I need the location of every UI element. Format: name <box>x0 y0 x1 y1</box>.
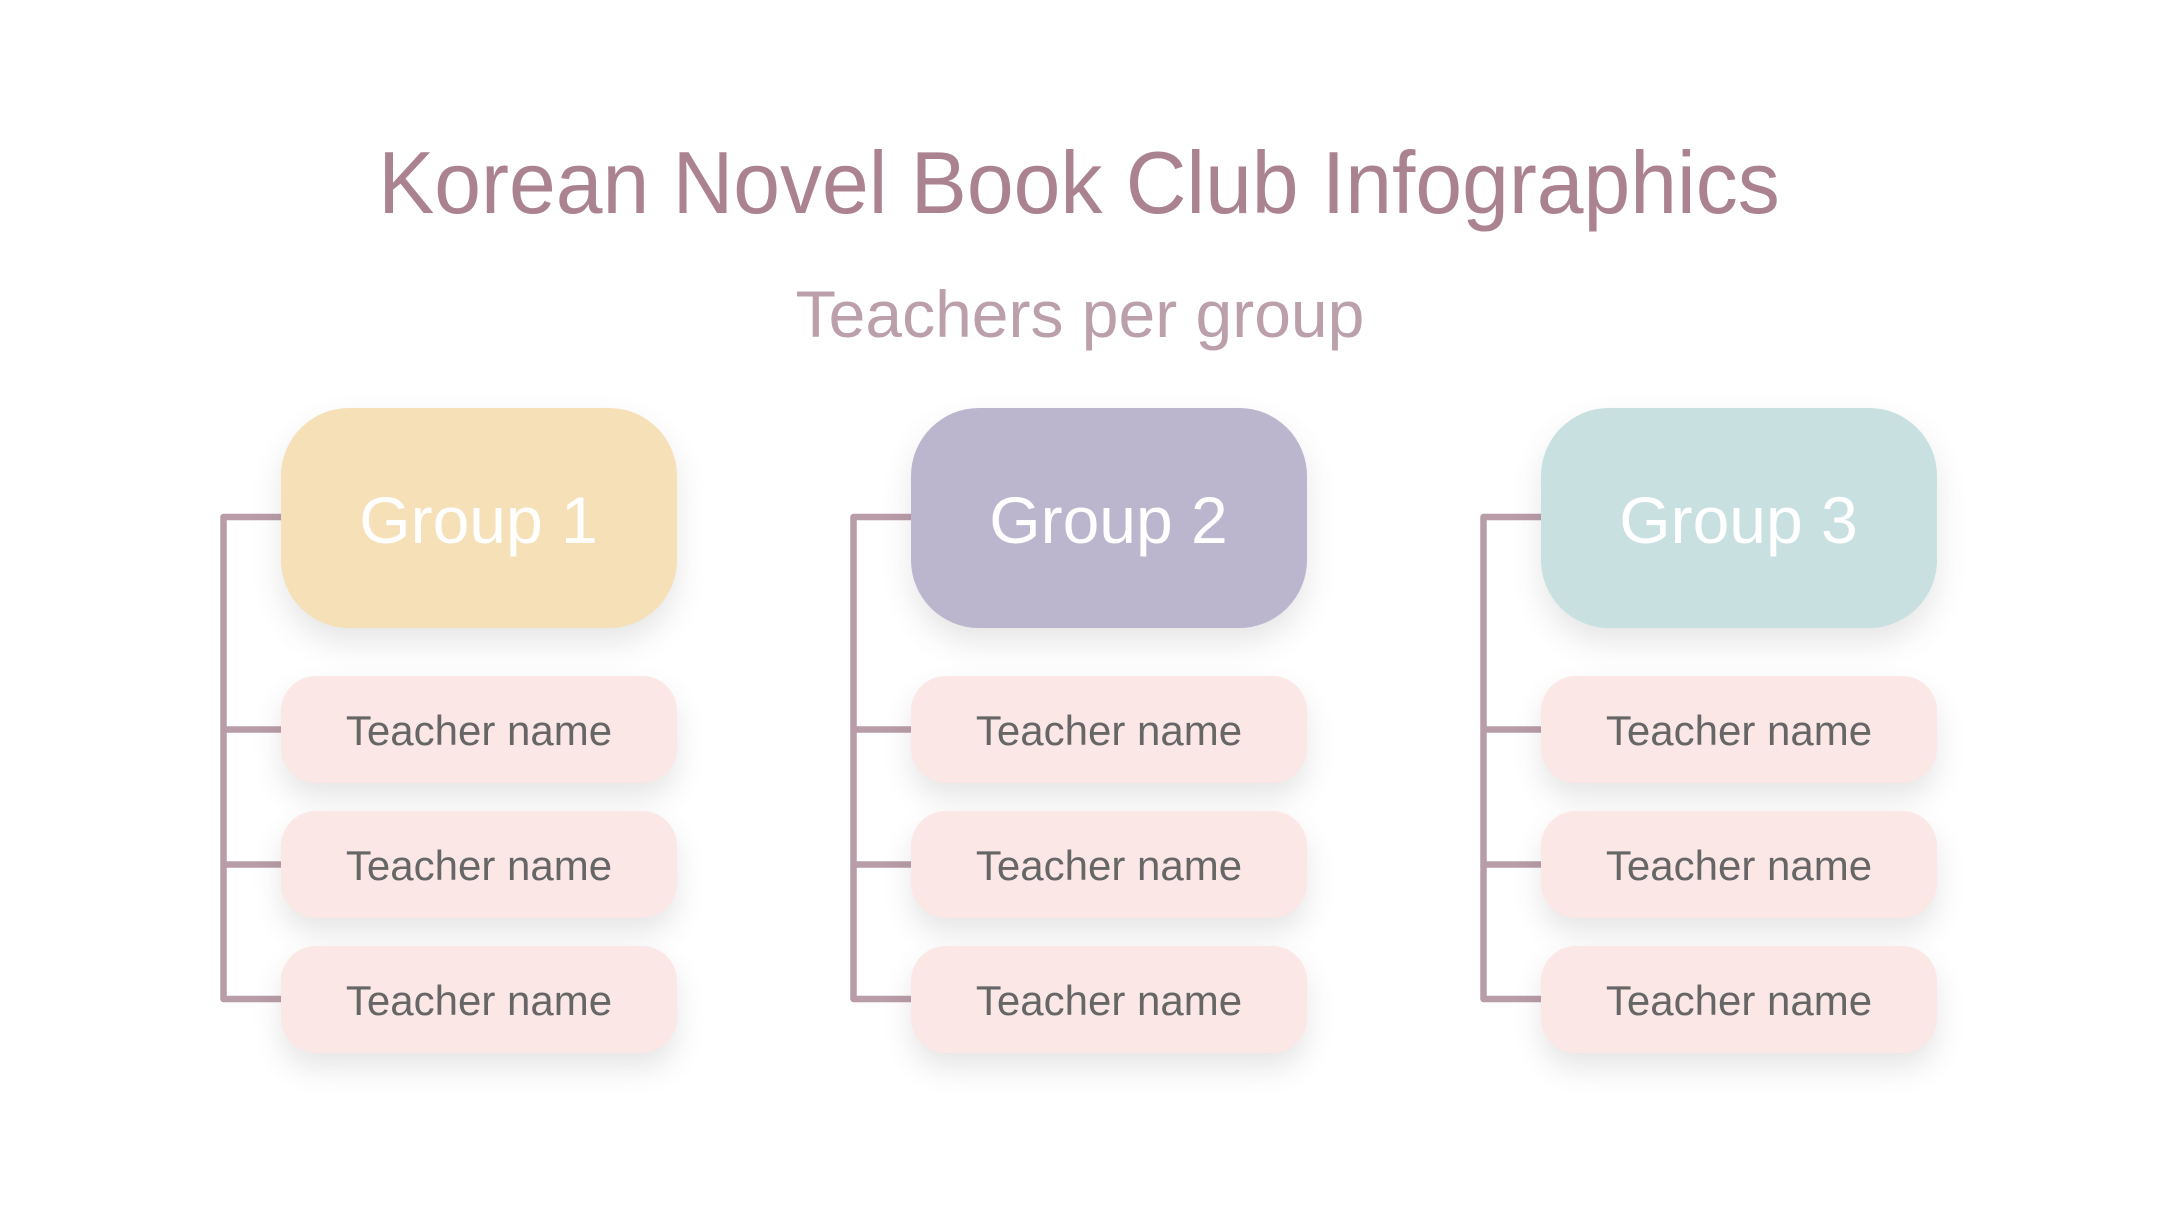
teacher 3 <box>281 946 677 1053</box>
heading: group 1 <box>281 408 677 628</box>
teacher 2 <box>911 811 1307 918</box>
connector lines: group 3 <box>1480 514 1541 1002</box>
teacher 2 <box>1541 811 1937 918</box>
connector lines: group 1 <box>220 514 281 1002</box>
heading: group 3 <box>1541 408 1937 628</box>
title: Korean Novel Book Club Infographics <box>378 133 1780 232</box>
teacher 2: Teacher name <box>1606 842 1872 889</box>
teacher 2: Teacher name <box>976 842 1242 889</box>
teacher 1 <box>911 676 1307 783</box>
subtitle: Teachers per group <box>796 277 1364 351</box>
connector lines: group 2 <box>850 514 911 1002</box>
heading: group 2: Group 2 <box>989 483 1228 557</box>
teacher 1 <box>281 676 677 783</box>
teacher 3: Teacher name <box>1606 977 1872 1024</box>
teacher 1: Teacher name <box>1606 707 1872 754</box>
teacher 2: Teacher name <box>346 842 612 889</box>
panel: group 3 <box>1480 408 1943 1074</box>
heading: group 1: Group 1 <box>359 483 598 557</box>
teacher 1 <box>1541 676 1937 783</box>
panel: group 1 <box>220 408 683 1074</box>
teacher 2 <box>281 811 677 918</box>
teacher 3: Teacher name <box>976 977 1242 1024</box>
panel: group 2 <box>850 408 1313 1074</box>
teacher 1: Teacher name <box>976 707 1242 754</box>
teacher 3 <box>911 946 1307 1053</box>
teacher 3 <box>1541 946 1937 1053</box>
teacher 1: Teacher name <box>346 707 612 754</box>
heading: group 3: Group 3 <box>1619 483 1858 557</box>
teacher 3: Teacher name <box>346 977 612 1024</box>
heading: group 2 <box>911 408 1307 628</box>
